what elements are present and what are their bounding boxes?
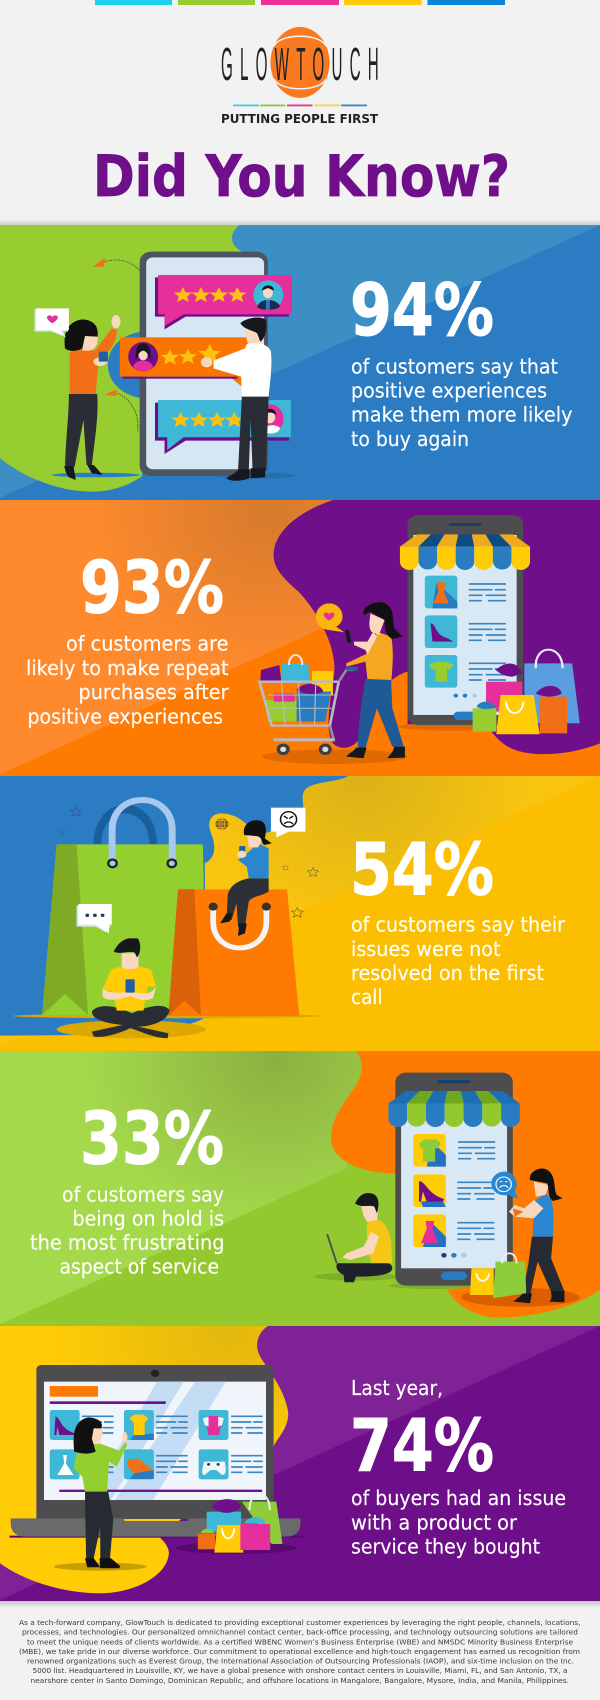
text: 93% description [26, 632, 229, 728]
panel: 74% buyers had an issue [0, 1326, 600, 1601]
stat: 93%: 93% [80, 545, 224, 629]
figure: woman at screen [73, 1417, 127, 1568]
figure: man sitting with phone [92, 938, 170, 1038]
text: 94% description: positive experiences [351, 378, 547, 402]
text: 94% description: to buy again [351, 427, 469, 451]
bubble: angry face [271, 808, 305, 837]
footer text [19, 1618, 580, 1685]
gift bags [473, 650, 580, 734]
logo: GlowTouch [221, 27, 379, 126]
bubble: sad face [491, 1172, 519, 1199]
text: 33% description: being on hold is [72, 1207, 224, 1231]
figure: woman with bags [509, 1169, 564, 1303]
figure: man with laptop [327, 1193, 392, 1282]
panel: 54% issues not resolved [0, 776, 600, 1051]
illustration: shopper and phone store [0, 500, 600, 774]
figure: woman [64, 315, 121, 480]
stat: 94%: 94% [350, 268, 494, 352]
footer text: 5000 list. Headquartered in Louisville, KY, we have a global presence with onshore contact centers in Louisville, Miami, FL, and San Antonio, TX, a [32, 1666, 568, 1675]
illustration: shopping bags [0, 776, 600, 1047]
stat: 74%: 74% [350, 1404, 494, 1488]
text: 93% description: positive experiences [28, 704, 223, 728]
text: 94% description: of customers say that [351, 354, 558, 378]
illustration: phone store and customers [0, 1051, 600, 1324]
footer text: As a tech-forward company, GlowTouch is dedicated to providing exceptional customer experiences by leveraging the right people, channels, locations, [19, 1618, 580, 1627]
text: 93% description: purchases after [78, 680, 229, 704]
figure: woman sitting on bag [220, 820, 272, 936]
text: 74% description: service they bought [351, 1534, 540, 1558]
text: 54% description: issues were not [351, 937, 501, 961]
logo: GlowTouch: GLOWTOUCH [221, 40, 379, 91]
gift bags [470, 1253, 526, 1298]
text: 93% description: of customers are [66, 632, 228, 656]
text: 54% description: resolved on the first [351, 961, 544, 985]
gift bags [198, 1494, 282, 1553]
footer text: processes, and technologies. Our personalized omnichannel contact center, back-office processing, and technology outsourcing solutions are tailored [22, 1628, 578, 1637]
title: Did You Know? [93, 144, 510, 210]
text: 54% description: call [351, 985, 382, 1009]
logo: GlowTouch: PUTTING PEOPLE FIRST [221, 111, 378, 126]
text: last year: Last year, [351, 1376, 443, 1400]
panel: 93% repeat purchases [0, 500, 600, 776]
text: 94% description: make them more likely [351, 403, 573, 427]
figure: woman shopping [345, 602, 405, 758]
illustration: phone reviews [0, 225, 295, 492]
text: 33% description: the most frustrating [30, 1231, 224, 1255]
panel: 33% being on hold [0, 1051, 600, 1327]
text: 74% description: with a product or [351, 1510, 518, 1534]
stat: 33%: 33% [80, 1097, 224, 1181]
text: 33% description: aspect of service [60, 1255, 219, 1279]
panel: 94% positive experiences [0, 225, 600, 500]
footer text: (MBE), we take pride in our diverse workforce. Our commitment to operational excellence and high-touch engagement has earned us recognition from [19, 1647, 580, 1656]
bubble: typing [77, 904, 112, 933]
shopping cart [259, 655, 354, 755]
text: 74% description [351, 1486, 566, 1558]
colour bars [95, 0, 505, 5]
text: 33% description: of customers say [62, 1183, 224, 1207]
illustration: laptop store and shopper [0, 1326, 304, 1593]
text: 93% description: likely to make repeat [26, 656, 229, 680]
footer text: nearshore center in Santo Domingo, Dominican Republic, and offshore locations in Mangalore, Bangalore, Mysore, India, and Manila, Philippines. [30, 1676, 569, 1685]
icon: globe [215, 818, 228, 830]
text: 94% description [351, 354, 573, 451]
text: 54% description: of customers say their [351, 913, 566, 937]
footer text: to meet the unique needs of clients worldwide. As a certified WBENC Women’s Business Enterprise (WBE) and NMSDC Minority Business Enterprise [27, 1637, 573, 1646]
bubble: heart [34, 308, 69, 337]
shadow below last panel [0, 1601, 600, 1608]
footer text: renowned organizations such as Everest Group, the International Association of Outsourcing Professionals (IAOP), and six-time inclusion on the Inc. [27, 1656, 574, 1666]
figure: man [201, 318, 271, 481]
bubble: heart [316, 603, 344, 632]
text: 74% description: of buyers had an issue [351, 1486, 566, 1510]
text: 33% description [30, 1183, 224, 1279]
text: 54% description [351, 913, 566, 1009]
stat: 54%: 54% [350, 827, 494, 911]
shadow above first panel [0, 219, 600, 225]
